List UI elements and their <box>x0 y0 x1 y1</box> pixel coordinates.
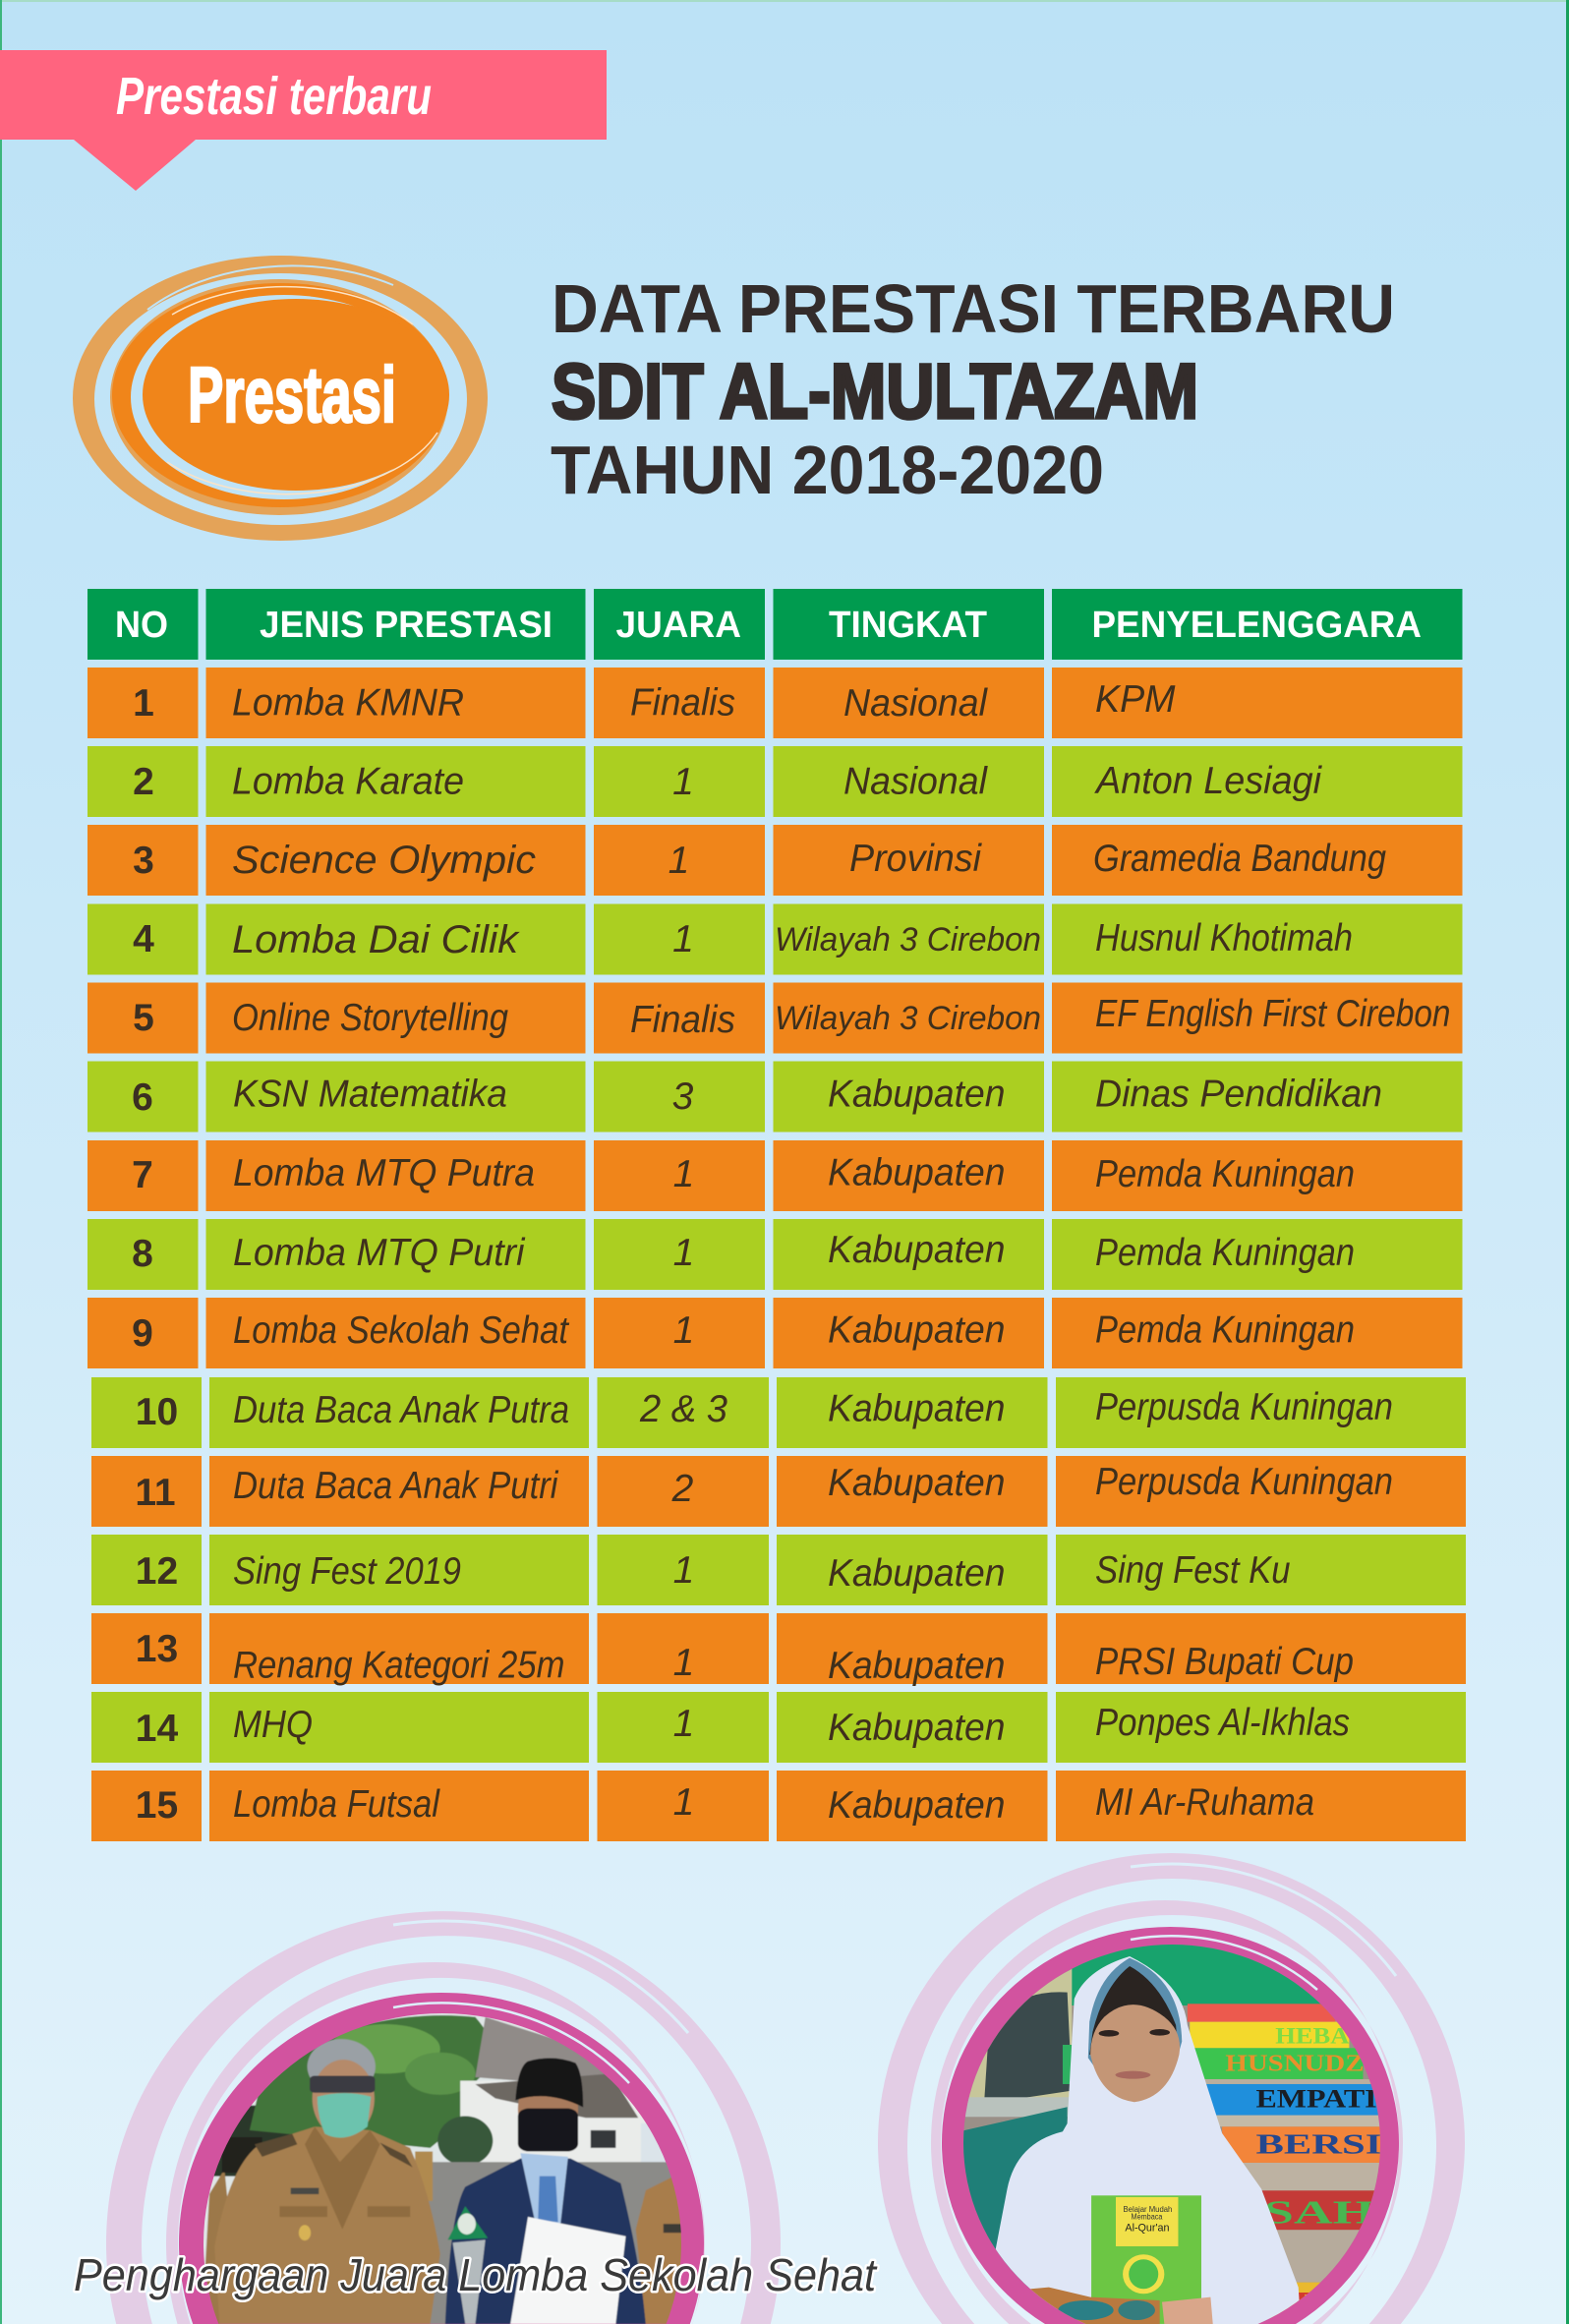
row 3: Provinsi <box>849 838 982 880</box>
row 15 <box>91 1771 1466 1841</box>
table header row: NO <box>115 605 168 646</box>
row 1: Lomba KMNR <box>232 682 464 724</box>
row 1: Nasional <box>843 682 988 725</box>
title line 2: SDIT AL-MULTAZAM <box>552 347 1198 435</box>
row 10: 10 <box>136 1391 178 1433</box>
row 11 <box>91 1456 1466 1527</box>
row 6: KSN Matematika <box>233 1074 507 1115</box>
row 15: Kabupaten <box>828 1784 1005 1827</box>
row 5: Wilayah 3 Cirebon <box>775 1000 1041 1037</box>
row 3 <box>87 825 1463 896</box>
row 7: Lomba MTQ Putra <box>233 1152 535 1194</box>
row 2: 2 <box>133 761 154 803</box>
table header row: JUARA <box>615 605 741 646</box>
row 7: Kabupaten <box>828 1152 1005 1193</box>
row 2: Anton Lesiagi <box>1094 760 1322 802</box>
table header row: JENIS PRESTASI <box>260 605 552 646</box>
row 11: Duta Baca Anak Putri <box>233 1465 559 1507</box>
row 5: 5 <box>133 997 154 1039</box>
row 6: 6 <box>132 1076 153 1119</box>
row 5: EF English First Cirebon <box>1095 993 1451 1035</box>
badge: Prestasi <box>73 256 488 541</box>
row 2: 1 <box>672 761 694 803</box>
photo frame right: student with book <box>878 1853 1465 2324</box>
banner: Prestasi terbaru <box>0 50 607 191</box>
row 9: Lomba Sekolah Sehat <box>233 1309 570 1352</box>
photo: student holding Qur'an book: Al-Qur'an <box>1125 2221 1170 2234</box>
row 6: Kabupaten <box>828 1074 1005 1115</box>
photo: student holding Qur'an book: HUSNUDZ <box>1225 2051 1364 2076</box>
row 15: 15 <box>136 1784 178 1827</box>
row 9: 9 <box>132 1312 153 1355</box>
row 3: Science Olympic <box>232 839 536 882</box>
row 4: 4 <box>133 918 154 960</box>
photo: student holding Qur'an book: TI <box>1287 2285 1333 2324</box>
row 1 <box>87 668 1463 738</box>
table header row: TINGKAT <box>829 605 987 646</box>
row 4: Husnul Khotimah <box>1095 917 1353 959</box>
title line 3: TAHUN 2018-2020 <box>551 432 1104 508</box>
row 7: 7 <box>132 1154 153 1196</box>
photo caption: Penghargaan Juara Lomba Sekolah Sehat <box>74 2249 878 2300</box>
photo: student holding Qur'an book: Belajar Mudah <box>1124 2205 1172 2214</box>
photo: two officials with award <box>204 2013 681 2324</box>
photo: student holding Qur'an book: HEBA <box>1275 2024 1350 2049</box>
row 12: Kabupaten <box>828 1552 1005 1595</box>
photo frame left: award recipients <box>106 1911 781 2324</box>
row 8 <box>87 1219 1463 1290</box>
photo: student holding Qur'an book: Membaca <box>1132 2213 1163 2222</box>
row 2 <box>87 746 1463 817</box>
row 8: Lomba MTQ Putri <box>233 1232 526 1274</box>
row 6: Dinas Pendidikan <box>1095 1074 1382 1115</box>
table header row <box>87 589 1463 660</box>
row 1: Finalis <box>630 682 735 724</box>
row 4 <box>87 904 1463 975</box>
row 13: Renang Kategori 25m <box>233 1644 564 1687</box>
row 3: 1 <box>669 840 689 882</box>
row 15: 1 <box>673 1781 694 1824</box>
row 9 <box>87 1298 1463 1368</box>
title line 1: DATA PRESTASI TERBARU <box>552 270 1395 347</box>
row 15: Lomba Futsal <box>233 1783 440 1826</box>
row 9: 1 <box>673 1309 694 1352</box>
row 11: Kabupaten <box>828 1462 1005 1504</box>
row 3: 3 <box>133 840 154 882</box>
row 14: Kabupaten <box>828 1707 1005 1749</box>
row 6 <box>87 1062 1463 1133</box>
row 14: MHQ <box>233 1704 313 1746</box>
row 10 <box>91 1377 1466 1448</box>
row 3: Gramedia Bandung <box>1093 838 1386 880</box>
row 8: Kabupaten <box>828 1229 1005 1271</box>
row 4: 1 <box>672 918 694 960</box>
table <box>87 589 1466 1841</box>
row 10: Duta Baca Anak Putra <box>233 1389 569 1431</box>
row 14: 1 <box>673 1703 694 1745</box>
row 12 <box>91 1535 1466 1605</box>
row 12: Sing Fest Ku <box>1095 1549 1290 1592</box>
row 2: Nasional <box>843 761 988 802</box>
row 12: Sing Fest 2019 <box>233 1550 461 1593</box>
row 13: PRSI Bupati Cup <box>1095 1641 1354 1683</box>
title block <box>551 270 1395 508</box>
row 12: 1 <box>673 1549 694 1592</box>
photo: student holding Qur'an book: SAH <box>1263 2194 1375 2231</box>
row 10: Kabupaten <box>828 1388 1005 1429</box>
row 13: 13 <box>136 1628 178 1670</box>
row 11: 11 <box>135 1472 176 1514</box>
row 2: Lomba Karate <box>232 761 464 802</box>
row 13 <box>91 1613 1466 1687</box>
banner: Prestasi terbaru: Prestasi terbaru <box>116 67 432 126</box>
row 4: Wilayah 3 Cirebon <box>775 921 1041 959</box>
row 5: Finalis <box>630 999 735 1041</box>
row 4: Lomba Dai Cilik <box>232 918 520 961</box>
table header row: PENYELENGGARA <box>1091 605 1422 646</box>
row 9: Kabupaten <box>828 1309 1005 1351</box>
row 7: Pemda Kuningan <box>1095 1153 1355 1195</box>
row 14: 14 <box>136 1708 178 1750</box>
decorative rings left <box>106 1911 781 2324</box>
row 1: KPM <box>1095 678 1176 721</box>
row 10: Perpusda Kuningan <box>1095 1386 1393 1428</box>
row 8: 8 <box>132 1233 153 1275</box>
decorative rings right <box>878 1853 1465 2324</box>
row 7: 1 <box>673 1153 694 1195</box>
row 8: 1 <box>673 1232 694 1274</box>
row 13: Kabupaten <box>828 1645 1005 1687</box>
row 11: 2 <box>671 1468 694 1510</box>
row 6: 3 <box>672 1075 694 1118</box>
photo: student holding Qur'an book: BERSI <box>1255 2129 1381 2160</box>
row 14: Ponpes Al-Ikhlas <box>1095 1702 1350 1744</box>
photo: student holding Qur'an book: EMPATI <box>1255 2084 1377 2114</box>
row 9: Pemda Kuningan <box>1095 1309 1355 1351</box>
row 13: 1 <box>673 1642 694 1684</box>
row 1: 1 <box>133 682 154 725</box>
row 5 <box>87 983 1463 1054</box>
photo: student holding Qur'an book <box>952 1940 1395 2324</box>
row 12: 12 <box>136 1550 178 1593</box>
row 10: 2 & 3 <box>639 1388 727 1430</box>
row 15: MI Ar-Ruhama <box>1095 1781 1314 1824</box>
row 14 <box>91 1692 1466 1763</box>
row 7 <box>87 1140 1463 1211</box>
row 8: Pemda Kuningan <box>1095 1232 1355 1274</box>
row 11: Perpusda Kuningan <box>1095 1461 1393 1503</box>
badge: Prestasi: Prestasi <box>188 351 396 438</box>
row 5: Online Storytelling <box>232 997 508 1039</box>
